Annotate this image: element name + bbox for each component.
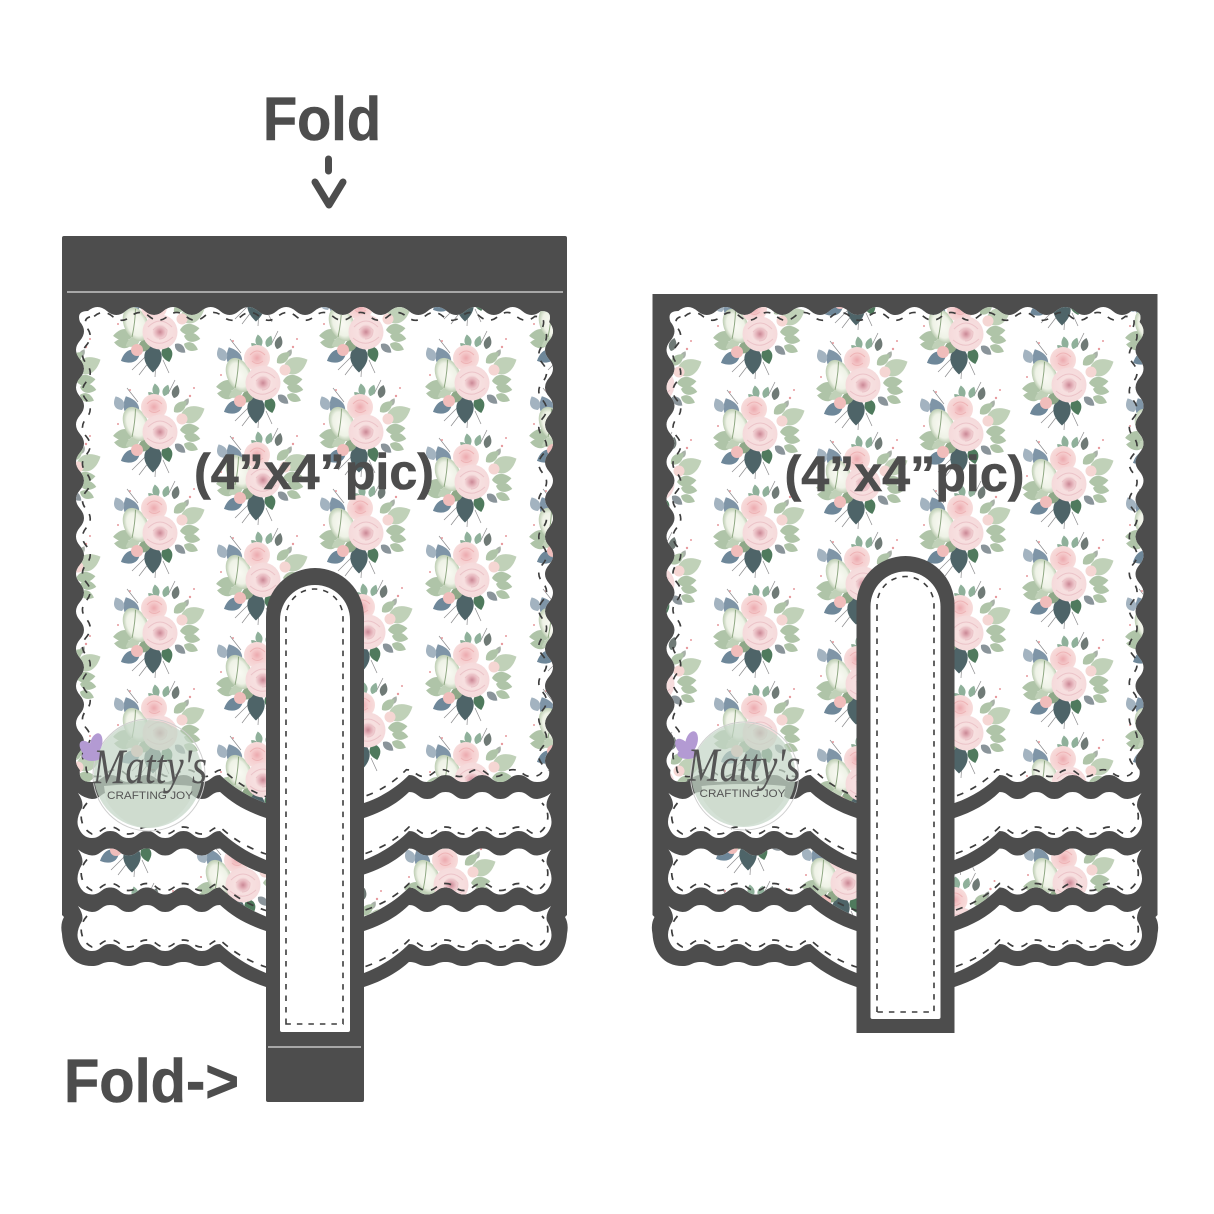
layer strip 3 bbox=[668, 905, 1142, 973]
card top edge bbox=[652, 294, 1158, 324]
watermark logo bbox=[76, 719, 207, 831]
layer strip 1 bbox=[78, 792, 552, 860]
watermark logo: CRAFTING JOY bbox=[107, 790, 194, 802]
watermark logo bbox=[672, 722, 800, 830]
label: Fold with arrow (bottom): Fold-> bbox=[64, 1047, 239, 1115]
watermark logo: CRAFTING JOY bbox=[700, 788, 786, 800]
layer strip 3 bbox=[78, 905, 552, 973]
watermark logo: Matty's bbox=[92, 738, 207, 794]
watermark logo: Matty's bbox=[687, 739, 800, 792]
main scalloped floral picture bbox=[76, 307, 553, 803]
fold line bbox=[67, 291, 563, 293]
card dark base silhouette bbox=[61, 300, 568, 987]
layer strip 1 bbox=[668, 792, 1142, 860]
label: picture size: (4”x4”pic) bbox=[194, 444, 434, 500]
panel: left card template bbox=[61, 236, 568, 1102]
heading: Fold (top): Fold bbox=[263, 85, 381, 153]
closure tab with tall arch bbox=[856, 556, 954, 1033]
label: picture size: (4”x4”pic) bbox=[784, 446, 1024, 502]
panel: right card template bbox=[652, 294, 1158, 1033]
pull tab with tall arch bbox=[266, 568, 364, 1102]
layer strip 2 with flowers bbox=[668, 848, 1142, 916]
arrow: fold pointing down bbox=[315, 159, 343, 205]
card dark base silhouette bbox=[652, 300, 1158, 987]
main scalloped floral picture bbox=[666, 307, 1144, 803]
card top fold flap bbox=[62, 236, 567, 316]
layer strip 2 with flowers bbox=[78, 848, 552, 916]
